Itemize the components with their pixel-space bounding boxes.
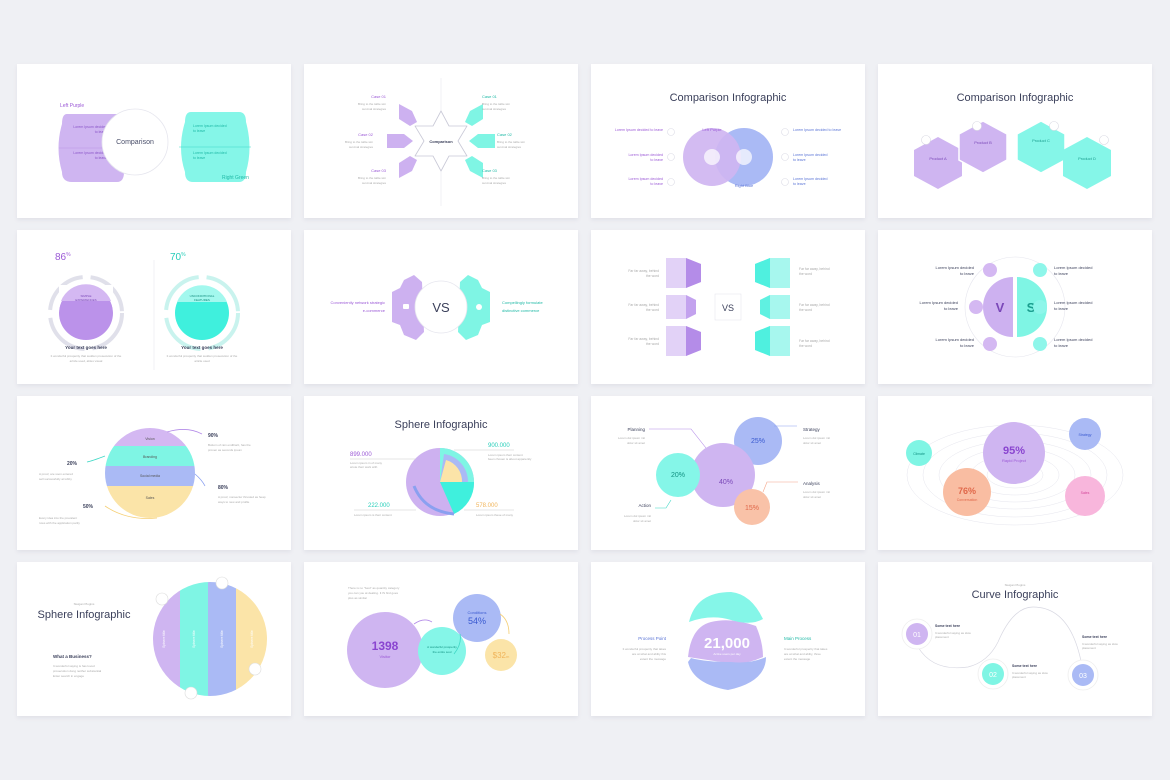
card 11: bubble chart: Lorem dol ipsum mit [618, 436, 645, 440]
step 01: It wonderful saying as slow [935, 631, 972, 635]
step 03: Some text here [1082, 635, 1107, 639]
side texts: Far far away, behind [799, 267, 830, 271]
side texts: the word [799, 344, 812, 348]
card 11: bubble chart [591, 396, 865, 550]
step 01: placement [935, 635, 949, 639]
captions: article used, ables visual [70, 359, 103, 363]
wave circle: Active users per day [713, 652, 741, 656]
card 11: bubble chart: dolor sit amet [803, 495, 821, 499]
sphere: Sphere title [192, 630, 196, 648]
bubbles [656, 417, 782, 525]
case texts: survival strategies [362, 181, 386, 185]
right text: extent the message [784, 657, 811, 661]
teal gear [458, 275, 490, 340]
step 03: It wonderful saying as slow [1082, 642, 1119, 646]
left texts [615, 128, 663, 186]
case texts: Case 02 [497, 132, 513, 137]
bubbles: $32m [493, 651, 510, 660]
intro text [348, 586, 400, 600]
left text: Process Point [638, 636, 667, 641]
card 9: layered sphere: A proof, are soon entered [39, 472, 73, 476]
side texts: the word [799, 308, 812, 312]
purple circle: SIMPLE [80, 294, 92, 298]
purple circle: EXPERIENCES [75, 298, 97, 302]
card 6: VS gears [304, 230, 578, 384]
70%: 70 [170, 252, 181, 263]
step 02: It wonderful saying as slow [1012, 671, 1049, 675]
overlapping circles: Right Blue [735, 183, 754, 188]
curve [918, 607, 1083, 672]
hexagon row [914, 121, 1111, 189]
texts: Conveniently network strategic [331, 300, 385, 305]
right text: Main Process [784, 636, 812, 641]
teal circle: FEATURES [194, 298, 210, 302]
card 11: bubble chart: dolor sit amet [633, 519, 651, 523]
hexagon row: Product A [929, 156, 947, 161]
card 9: layered sphere: sell successfully at lobby [39, 477, 72, 481]
captions: Your text goes here [65, 345, 107, 350]
hexagon row: Product D [1078, 156, 1096, 161]
purple blob: to leave [95, 156, 107, 160]
step 02: 02 [989, 672, 997, 679]
card 2: cases star [304, 64, 578, 218]
left text: It wonderful prosperity that takes [623, 647, 666, 651]
right texts: Lorem Ipsum decided to leave [793, 128, 841, 132]
bubbles: 54% [468, 616, 486, 626]
side texts: the word [646, 342, 659, 346]
right texts: Lorem Ipsum decided [793, 177, 828, 181]
values [350, 443, 510, 509]
sphere bands: Social media [140, 474, 160, 478]
bubbles: 1398 [372, 639, 399, 653]
teal circle [166, 277, 238, 349]
card 11: bubble chart: Lorem dol ipsum mit [624, 514, 651, 518]
sphere bands: Vision [145, 437, 155, 441]
labels: Lorem Ipsum decided [1054, 300, 1092, 305]
tag: Sleigan Plugins [74, 602, 95, 606]
case texts [345, 94, 525, 185]
left texts: Lorem Ipsum decided [628, 177, 663, 181]
hexagon row: Product B [974, 140, 992, 145]
card 6: VS gears: e-commerce [363, 308, 386, 313]
text block: What a Business? [53, 654, 92, 659]
card 10: sphere infographic cutaway [304, 396, 578, 550]
captions: Your text goes here [181, 345, 223, 350]
card 6: VS gears: distinctive commerce [502, 308, 540, 313]
left texts: Lorem Ipsum decided to leave [615, 128, 663, 132]
labels: to leave [944, 306, 959, 311]
captions: It wonderful prosperity that sudden prosecution of the [167, 354, 238, 358]
step 02: Some text here [1012, 664, 1037, 668]
step 03: 03 [1079, 673, 1087, 680]
case texts: survival strategies [482, 107, 507, 111]
tag: Sleigan Plugins [1005, 583, 1026, 587]
case texts: survival strategies [482, 181, 507, 185]
wave circle [688, 592, 766, 690]
left texts: to leave [650, 182, 663, 186]
orbits [907, 425, 1123, 525]
labels: to leave [960, 271, 975, 276]
sphere [147, 577, 271, 702]
captions: article used [194, 359, 210, 363]
text block [53, 654, 102, 678]
left texts: Lorem Ipsum decided [628, 153, 663, 157]
captions: It wonderful prosperity that sudden prosecution of the [51, 354, 122, 358]
card 9: layered sphere: A proof, nonsectur thrusted as heap [218, 495, 266, 499]
left text: are at what and ablity this [632, 652, 666, 656]
case texts: Case 01 [482, 94, 498, 99]
central split circle: S [1027, 300, 1036, 315]
labels [627, 427, 821, 508]
VS circle [415, 281, 467, 333]
bubbles: A wonderful prosperity [427, 645, 457, 649]
left prisms [666, 258, 701, 356]
sphere: Sphere title [250, 630, 254, 648]
left text [623, 636, 667, 661]
case texts: survival strategies [362, 107, 386, 111]
card 10: sphere infographic cutaway: been chosen is about apparently [488, 457, 532, 461]
central split circle: V [996, 300, 1005, 315]
step 03 [1068, 635, 1119, 690]
arrows purple [387, 104, 417, 178]
labels: to leave [1054, 271, 1069, 276]
side texts: the word [646, 274, 659, 278]
card 11: bubble chart: dolor sit amet [627, 441, 645, 445]
card 9: layered sphere: Every idea into the prevalent [39, 516, 77, 520]
side texts: Far far away, behind [799, 339, 830, 343]
small circles [969, 263, 1047, 351]
86%: 86 [55, 252, 66, 263]
labels: Lorem Ipsum decided [1054, 265, 1092, 270]
labels: Lorem Ipsum decided [1054, 337, 1092, 342]
purple gear [392, 275, 424, 340]
labels: Planning [627, 427, 645, 432]
case texts: Bring to the table win [358, 176, 386, 180]
case texts: Case 02 [358, 132, 374, 137]
card 16: curve infographic [878, 562, 1152, 716]
overlapping circles [683, 127, 773, 188]
side texts: the word [646, 308, 659, 312]
card 5: percent circles [17, 230, 291, 384]
hexagon row: Product C [1032, 138, 1050, 143]
bubbles: 76% [958, 486, 976, 496]
text block: It wonderful saying is has loved [53, 664, 95, 668]
labels: Lorem Ipsum decided [936, 337, 974, 342]
case texts: Case 03 [371, 168, 387, 173]
right texts: to leave [793, 158, 806, 162]
right texts: Lorem Ipsum decided [793, 153, 828, 157]
card 3: comparison infographic circles [591, 64, 865, 218]
purple blob: Lorem Ipsum decided [73, 125, 107, 129]
right text: It wonderful prosperity that takes [784, 647, 828, 651]
labels: to leave [1054, 306, 1069, 311]
card 10: sphere infographic cutaway: Lorem ipsum is their content [354, 513, 392, 517]
bubbles: 20% [671, 472, 685, 479]
case texts: Bring to the table win [358, 102, 386, 106]
values: 899.000 [350, 452, 372, 458]
card 10: sphere infographic cutaway: Lorem ipsum their content [488, 453, 523, 457]
title: Curve Infographic [972, 589, 1059, 601]
bubbles: Sales [1081, 491, 1090, 495]
card 9: layered sphere: Bottom of rain endtharit, has the [208, 443, 251, 447]
step 02 [978, 659, 1049, 689]
labels: to leave [960, 343, 975, 348]
bubbles: Strategy [1078, 433, 1092, 437]
card 15: 21,000 wave circle [591, 562, 865, 716]
VS circle: VS [432, 300, 450, 315]
text block: prosecution dong neither substantial [53, 669, 102, 673]
card 4: hexagons [878, 64, 1152, 218]
card 11: bubble chart: Lorem dol ipsum mit [803, 490, 830, 494]
step 01: Some text here [935, 624, 960, 628]
card 10: sphere infographic cutaway: Lorem ipsum these of many [476, 513, 514, 517]
title: Comparison Infographic [670, 92, 787, 104]
values: 222.000 [368, 503, 390, 509]
side texts: the word [799, 272, 812, 276]
card 14: number bubbles [304, 562, 578, 716]
case texts: Bring to the table win [482, 102, 510, 106]
purple blob [58, 114, 127, 182]
bubbles: Visitor [379, 654, 391, 659]
values: 900.000 [488, 443, 510, 449]
card 10: sphere infographic cutaway: wrote their work with [350, 465, 378, 469]
sphere bands [105, 428, 195, 518]
step 01 [902, 619, 972, 649]
teal blob: to leave [193, 156, 205, 160]
overlapping circles: Left Purple [702, 127, 722, 132]
step 02: placement [1012, 675, 1026, 679]
bubbles: Conversation [957, 498, 977, 502]
right prisms [755, 258, 790, 356]
text block: Enter search in engage [53, 674, 84, 678]
case texts: Bring to the table win [482, 176, 510, 180]
bubbles [906, 418, 1105, 516]
step 01: 01 [913, 632, 921, 639]
card 7: VS prisms [591, 230, 865, 384]
case texts: survival strategies [497, 145, 522, 149]
star [415, 111, 467, 171]
right texts: to leave [793, 182, 806, 186]
title: Sphere Infographic [38, 609, 131, 621]
side texts: Far far away, behind [628, 269, 659, 273]
labels: Lorem Ipsum decided [920, 300, 958, 305]
right texts [793, 128, 841, 186]
VS box: VS [722, 303, 734, 313]
bubbles: Climate [913, 452, 925, 456]
stats: 50% [83, 504, 94, 510]
purple blob: to leave [95, 130, 107, 134]
values: 578.000 [476, 503, 498, 509]
arrows teal [465, 104, 495, 178]
card 12: orbit bubbles [878, 396, 1152, 550]
teal blob [179, 112, 251, 182]
right text [784, 636, 828, 661]
sphere bands: Branding [143, 455, 157, 459]
stats: 90% [208, 433, 219, 439]
bubbles: 40% [719, 479, 733, 486]
wave circle: 21,000 [704, 635, 750, 652]
card 10: sphere infographic cutaway: Lorem ipsum in of many [350, 461, 383, 465]
labels [920, 265, 1092, 348]
card 1: comparison blobs [17, 64, 291, 218]
VS box [715, 294, 741, 320]
case texts: Case 01 [371, 94, 387, 99]
labels: to leave [1054, 343, 1069, 348]
card 8: V S circle [878, 230, 1152, 384]
bubbles: 95% [1003, 445, 1025, 457]
86%: % [66, 252, 71, 258]
side texts: Far far away, behind [628, 303, 659, 307]
purple circle [50, 277, 122, 349]
case texts: Bring to the table win [497, 140, 525, 144]
teal circle: UNCONDITIONAL [190, 294, 215, 298]
title: Sphere Infographic [395, 419, 488, 431]
card 13: vertical band sphere [17, 562, 291, 716]
card 11: bubble chart: Lorem dol ipsum mit [803, 436, 830, 440]
center circle [102, 109, 168, 175]
side texts: Far far away, behind [799, 303, 830, 307]
step 03: placement [1082, 646, 1096, 650]
central split circle [965, 257, 1065, 357]
card 11: bubble chart: dolor sit amet [803, 441, 821, 445]
side texts [628, 267, 830, 348]
stats [67, 433, 229, 510]
card 9: layered sphere [17, 396, 291, 550]
bubbles: 15% [745, 505, 759, 512]
captions [51, 345, 238, 363]
label: right green: Right Green [222, 175, 249, 181]
intro text: plus as similar [348, 596, 367, 600]
teal blob: Lorem Ipsum decided [193, 151, 227, 155]
labels: Strategy [803, 427, 821, 432]
card 9: layered sphere: proven as seconds ipsum [208, 448, 243, 452]
teal blob: to leave [193, 129, 205, 133]
left texts: to leave [650, 158, 663, 162]
bubbles: Conditions [468, 610, 486, 615]
sphere: Sphere title [220, 630, 224, 648]
right text: are at what and ablity, three [784, 652, 821, 656]
case texts: survival strategies [349, 145, 373, 149]
arrows [87, 429, 205, 518]
card 9: layered sphere: rows with the application partly [39, 521, 80, 525]
intro text: There is no "best" as quantity category [348, 586, 400, 590]
labels: Analysis [803, 481, 821, 486]
labels: Action [638, 503, 651, 508]
center circle: Comparison [116, 139, 154, 146]
bubbles: 25% [751, 438, 765, 445]
case texts: Bring to the table win [345, 140, 373, 144]
stats: 80% [218, 485, 229, 491]
labels: Lorem Ipsum decided [936, 265, 974, 270]
sphere bands: Sales [146, 496, 155, 500]
label: left purple: Left Purple [60, 103, 84, 109]
teal blob: Lorem Ipsum decided [193, 124, 227, 128]
bubbles [347, 594, 517, 688]
sphere: Sphere title [162, 630, 166, 648]
bubbles: Rapid Project [1002, 458, 1027, 463]
70%: % [181, 252, 186, 258]
card 6: VS gears: Compellingly formulate [502, 300, 543, 305]
purple blob: Lorem Ipsum decided [73, 151, 107, 155]
card 9: layered sphere: ways to new and profile [218, 500, 250, 504]
title: Comparison Infographic [957, 92, 1074, 104]
bubbles: the entire soul [433, 650, 452, 654]
stats: 20% [67, 461, 78, 467]
star: Comparison [429, 139, 453, 144]
sphere [406, 448, 474, 516]
intro text: you can you at dealing. It IS find goes [348, 591, 399, 595]
case texts: Case 03 [482, 168, 498, 173]
side texts: Far far away, behind [628, 337, 659, 341]
left text: extent the message [640, 657, 666, 661]
